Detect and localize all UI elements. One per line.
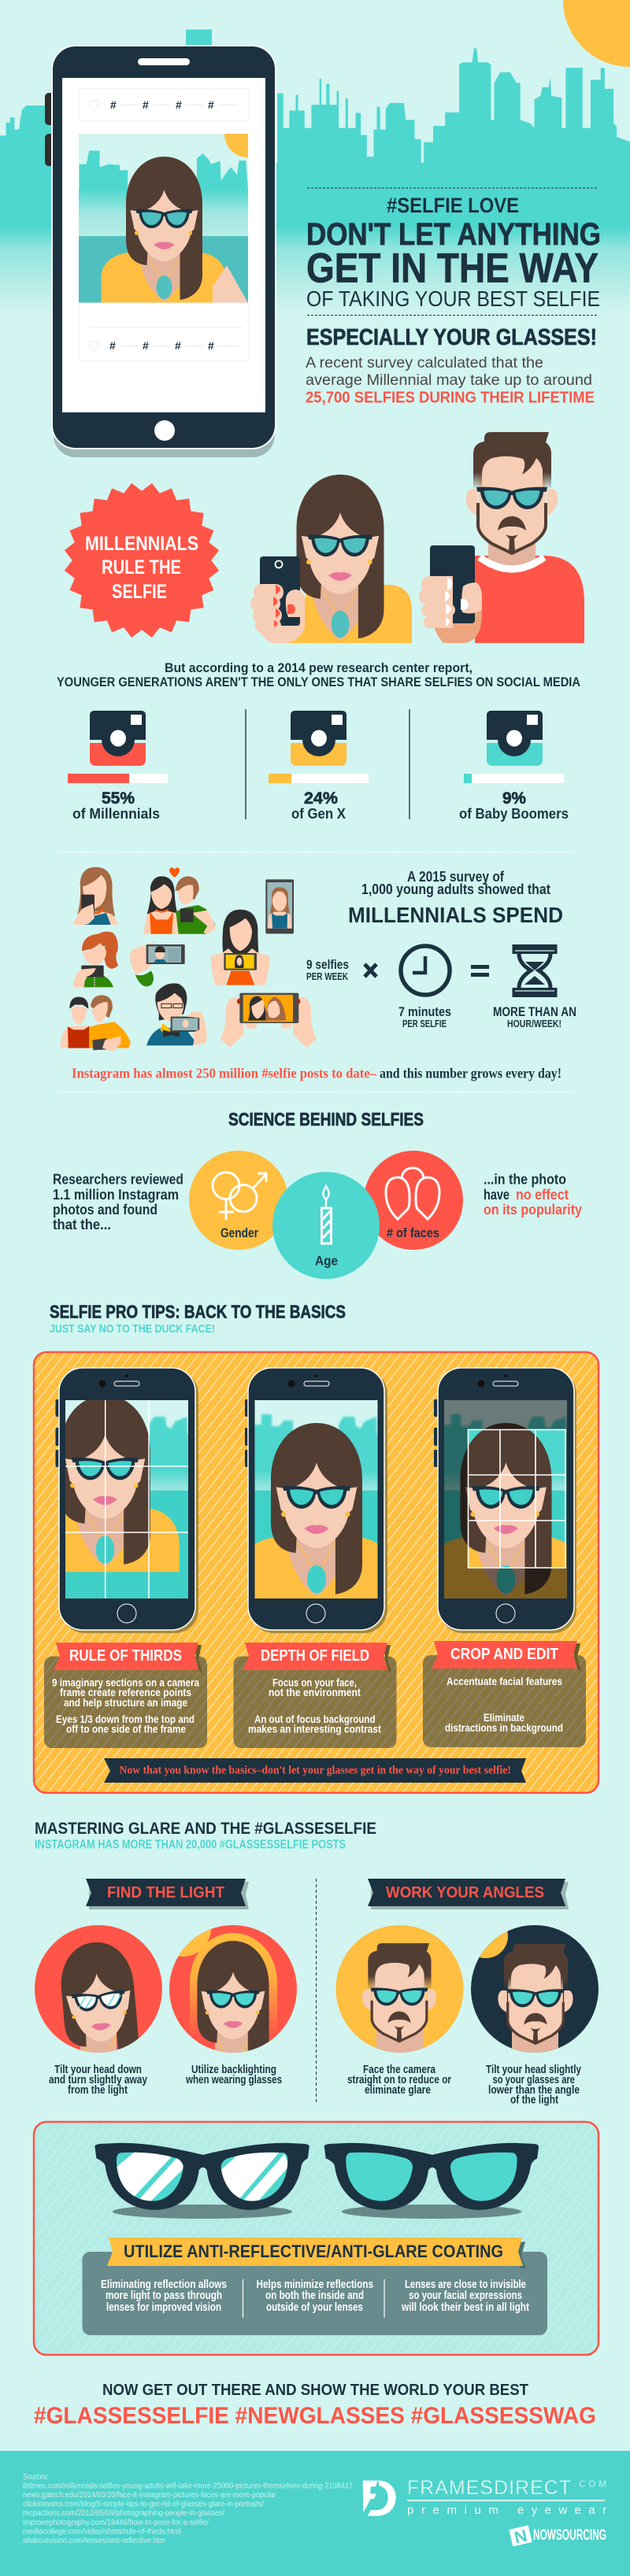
woman taking selfie <box>250 475 412 643</box>
seal: millennials rule the selfie <box>65 483 219 638</box>
captions: work your angles: of the light <box>510 2094 558 2106</box>
coating text box: outside of your lenses <box>266 2301 363 2314</box>
closing call to action: #GLASSESSELFIE #NEWGLASSES #GLASSESSWAG <box>34 2403 596 2429</box>
researchers text: photos and found <box>53 1202 158 1218</box>
icon: instagram camera yellow <box>291 711 346 766</box>
coating text box <box>82 2238 547 2335</box>
coating text box: more light to pass through <box>106 2289 222 2302</box>
sources <box>23 2472 353 2545</box>
caption: 7 minutes: PER SELFIE <box>402 1018 447 1029</box>
glare heading: INSTAGRAM HAS MORE THAN 20,000 #GLASSESSELFIE POSTS <box>35 1839 346 1851</box>
sources: mcpactions.com/2012/05/09/photographing-people-in-glasses/ <box>23 2508 224 2518</box>
circle: gender <box>189 1151 288 1250</box>
hero title: average Millennial may take up to around <box>306 372 592 389</box>
framesdirect logo: FRAMESDIRECT <box>407 2478 571 2499</box>
coating text box: will look their best in all light <box>401 2301 529 2314</box>
person: woman on phone screen <box>265 879 294 933</box>
coating text box: Helps minimize reflections <box>257 2278 373 2291</box>
captions: work your angles <box>347 2063 582 2106</box>
circle: tilted man <box>471 1925 598 2053</box>
circle: straight man <box>335 1925 463 2054</box>
top hashtag card: # <box>176 98 182 111</box>
stat: gen x: 24% <box>304 789 338 808</box>
text box: rule of thirds: RULE OF THIRDS <box>69 1647 182 1665</box>
banner: basics: Now that you know the basics–don't let your glasses get in the way of your best selfie! <box>120 1765 511 1777</box>
top hashtag card <box>79 88 249 121</box>
sources: news.gatech.edu/2014/03/20/face-it-instagram-pictures-faces-are-more-popular <box>23 2490 276 2500</box>
phone: depth of field <box>241 1368 392 1633</box>
text box: rule of thirds: 9 imaginary sections on a camera <box>52 1676 199 1689</box>
popularity text: no effect <box>516 1187 569 1203</box>
text box: depth of field: An out of focus background <box>254 1713 375 1725</box>
seal: millennials rule the selfie: MILLENNIALS <box>85 533 198 555</box>
captions: work your angles: lower than the angle <box>488 2083 580 2097</box>
icon: equals <box>471 965 489 977</box>
top hashtag card: # <box>143 98 149 111</box>
pew research statement: But according to a 2014 pew research center report, <box>165 660 472 675</box>
researchers text: that the... <box>53 1217 111 1233</box>
caption: more than an hour: HOUR/WEEK! <box>507 1018 561 1029</box>
popularity text: have <box>484 1187 513 1203</box>
text box: crop and edit: Accentuate facial features <box>447 1676 562 1687</box>
city skyline <box>0 48 630 315</box>
sources: ibtimes.com/millennials-selfies-young-adults-will-take-more-25000-pictures-themselves-during-2108417 <box>23 2481 353 2490</box>
circle: backlight woman <box>169 1925 297 2053</box>
circle: age <box>272 1172 380 1279</box>
text box: crop and edit: Eliminate <box>484 1712 524 1724</box>
circle: tilt head woman <box>35 1925 162 2053</box>
ribbon: find the light: FIND THE LIGHT <box>107 1884 224 1902</box>
sources: clickinmoms.com/blog/5-simple-tips-to-get-rid-of-glasses-glare-in-portraits/ <box>23 2500 264 2509</box>
framesdirect logo: premium <box>407 2504 498 2517</box>
instagram statement: and this number grows every day! <box>380 1066 561 1081</box>
researchers text: 1.1 million Instagram <box>53 1187 179 1203</box>
stat: baby boomers <box>459 711 569 822</box>
captions: find the light: Utilize backlighting <box>191 2063 276 2076</box>
researchers text: Researchers reviewed <box>53 1171 183 1187</box>
stat: millennials <box>68 711 168 822</box>
coating text box: on both the inside and <box>265 2289 364 2302</box>
stat: gen x <box>269 711 369 822</box>
pro tips heading: SELFIE PRO TIPS: BACK TO THE BASICS <box>50 1302 346 1322</box>
person: woman with phone <box>73 867 118 925</box>
bottom hashtag card <box>79 303 249 360</box>
closing call to action <box>34 2382 596 2429</box>
nowsourcing logo: N <box>513 2526 529 2547</box>
equation: selfies per week: 9 selfies <box>306 957 349 972</box>
text box: rule of thirds: Eyes 1/3 down from the top and <box>56 1713 195 1725</box>
text box: depth of field: not the environment <box>269 1687 361 1698</box>
hero phone <box>45 46 276 457</box>
text box: depth of field: makes an interesting contrast <box>248 1724 381 1735</box>
pew research statement <box>57 660 580 689</box>
icon: instagram camera red <box>90 711 146 766</box>
sources: allaboutvision.com/lenses/anti-reflective.htm <box>23 2536 165 2545</box>
glare heading <box>35 1820 376 1851</box>
text box: rule of thirds: and help structure an image <box>64 1697 187 1709</box>
person: man with glasses <box>146 983 206 1045</box>
pro tips heading <box>50 1302 346 1336</box>
icon: clock <box>401 946 450 995</box>
caption: more than an hour <box>493 1004 576 1029</box>
stat: millennials: of Millennials <box>72 806 160 822</box>
man taking selfie <box>419 432 584 643</box>
selfie people illustrations <box>61 867 317 1051</box>
caption: 7 minutes: 7 minutes <box>398 1004 451 1019</box>
hero title: A recent survey calculated that the <box>306 355 543 371</box>
footer <box>0 2451 630 2576</box>
science heading: SCIENCE BEHIND SELFIES <box>228 1109 424 1129</box>
sources: improvephotography.com/19446/how-to-pose-for-a-selfie/ <box>23 2518 209 2527</box>
icon: hourglass <box>512 944 558 997</box>
sources: mediacollege.com/video/shots/rule-of-thirds.html <box>23 2526 181 2536</box>
hero title: #SELFIE LOVE <box>387 194 519 217</box>
ribbon: find the light <box>86 1879 249 1909</box>
captions: find the light: when wearing glasses <box>185 2073 282 2086</box>
survey text <box>348 869 563 927</box>
text box: crop and edit: distractions in background <box>445 1722 563 1734</box>
popularity text: on its popularity <box>484 1202 582 1218</box>
survey text: 1,000 young adults showed that <box>361 881 550 897</box>
glasses without glare <box>324 2143 539 2219</box>
ribbon: work your angles: WORK YOUR ANGLES <box>386 1884 544 1902</box>
captions: find the light: and turn slightly away <box>49 2073 148 2086</box>
captions: work your angles: Tilt your head slightly <box>486 2063 582 2076</box>
sun <box>563 0 630 67</box>
circle: gender: Gender <box>220 1225 258 1240</box>
icon: multiply <box>365 964 376 977</box>
icon: hand holding phone <box>130 942 185 986</box>
seal: millennials rule the selfie: RULE THE <box>102 556 181 578</box>
captions: find the light: from the light <box>68 2083 128 2097</box>
survey text: A 2015 survey of <box>407 869 505 885</box>
stat: baby boomers: of Baby Boomers <box>459 806 569 822</box>
text box: depth of field: DEPTH OF FIELD <box>261 1647 369 1665</box>
coating text box: UTILIZE ANTI-REFLECTIVE/ANTI-GLARE COATING <box>124 2242 503 2261</box>
nowsourcing logo <box>509 2525 606 2547</box>
bottom hashtag card: # <box>109 339 116 352</box>
coating text box: lenses for improved vision <box>106 2301 221 2314</box>
bottom hashtag card: # <box>208 339 214 352</box>
text box: crop and edit <box>423 1641 586 1747</box>
panel: anti-reflective <box>34 2122 598 2355</box>
circle: faces: # of faces <box>387 1225 439 1240</box>
top hashtag card: # <box>208 98 214 111</box>
top hashtag card: # <box>110 98 117 111</box>
framesdirect logo: eyewear <box>517 2504 606 2517</box>
captions: find the light: Tilt your head down <box>54 2063 142 2076</box>
phone held by woman <box>250 556 305 643</box>
panel: pro tips <box>31 1352 598 1793</box>
icon: two hands holding phone <box>220 993 317 1048</box>
closing call to action: NOW GET OUT THERE AND SHOW THE WORLD YOUR BEST <box>102 2382 528 2399</box>
bottom hashtag card: # <box>175 339 181 352</box>
stat: baby boomers: 9% <box>502 789 526 808</box>
coating text box: Lenses are close to invisible <box>405 2278 526 2291</box>
caption: 7 minutes <box>398 1004 451 1029</box>
tab above phone <box>186 30 212 46</box>
caption: more than an hour: MORE THAN AN <box>493 1004 576 1019</box>
icon: instagram camera teal <box>487 711 543 766</box>
coating text box: Eliminating reflection allows <box>101 2278 227 2291</box>
equation: selfies per week <box>306 957 349 982</box>
glare heading: MASTERING GLARE AND THE #GLASSESELFIE <box>35 1820 376 1838</box>
icon: fd mark <box>363 2481 396 2516</box>
coating text box: so your facial expressions <box>409 2289 522 2302</box>
phone: crop and edit <box>431 1368 581 1633</box>
popularity text: ...in the photo <box>484 1171 566 1187</box>
hero title: 25,700 SELFIES DURING THEIR LIFETIME <box>306 389 595 406</box>
text box: rule of thirds <box>44 1643 207 1748</box>
captions: work your angles: Face the camera <box>363 2063 436 2076</box>
stat: millennials: 55% <box>102 789 135 808</box>
text box: rule of thirds: off to one side of the frame <box>66 1724 186 1735</box>
glasses with glare <box>94 2143 309 2219</box>
captions: work your angles: straight on to reduce or <box>347 2073 451 2086</box>
captions: work your angles: so your glasses are <box>493 2073 575 2086</box>
banner: basics <box>104 1758 526 1783</box>
ribbon: work your angles <box>368 1879 569 1909</box>
hero title <box>306 188 601 406</box>
person: couple selfie <box>143 876 215 934</box>
stat: gen x: of Gen X <box>291 806 346 822</box>
framesdirect logo <box>363 2478 606 2517</box>
text box: rule of thirds: frame create reference points <box>60 1687 191 1698</box>
icon: heart <box>169 867 180 878</box>
phone: rule of thirds <box>55 1367 198 1633</box>
text box: depth of field <box>233 1643 397 1748</box>
pro tips heading: JUST SAY NO TO THE DUCK FACE! <box>50 1322 215 1336</box>
text box: crop and edit: CROP AND EDIT <box>450 1646 558 1663</box>
circle: age: Age <box>315 1253 338 1269</box>
text box: depth of field: Focus on your face, <box>272 1676 357 1689</box>
circle: faces <box>364 1151 463 1250</box>
framesdirect logo: .COM <box>573 2480 606 2489</box>
selfie photo <box>79 134 248 302</box>
seal: millennials rule the selfie: SELFIE <box>112 581 167 603</box>
person: red haired woman <box>73 932 118 987</box>
equation: selfies per week: PER WEEK <box>306 970 348 982</box>
sources: Sources: <box>23 2472 49 2482</box>
survey text: MILLENNIALS SPEND <box>348 903 563 927</box>
bottom hashtag card: # <box>143 339 149 352</box>
captions: work your angles: eliminate glare <box>365 2083 431 2097</box>
person: couple two <box>61 995 131 1051</box>
hero title: OF TAKING YOUR BEST SELFIE <box>306 286 600 311</box>
captions: find the light <box>49 2063 282 2097</box>
person: woman holding phone <box>210 910 270 985</box>
instagram statement: Instagram has almost 250 million #selfie posts to date– <box>72 1066 377 1081</box>
